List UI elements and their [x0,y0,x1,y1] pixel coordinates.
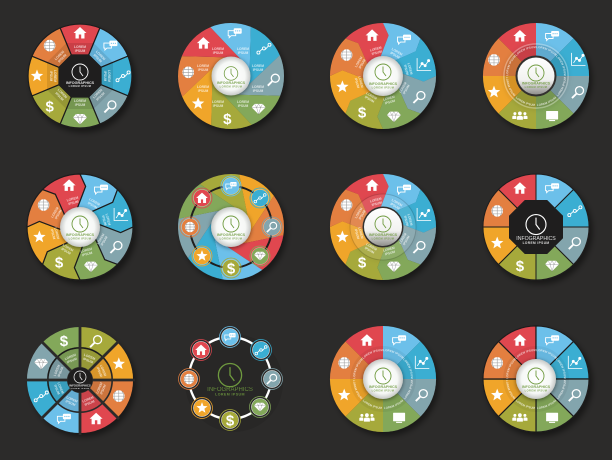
sector labels: IPSUM [103,71,107,81]
bubble: star [192,398,212,418]
sectors [28,24,132,128]
sector labels: LOREM [398,232,408,245]
curved labels: LOREM IPSUM [362,349,383,359]
sector labels: IPSUM [253,68,263,72]
sector labels: LOREM [365,91,378,101]
sector labels: LOREM [357,76,364,88]
sector labels: IPSUM [82,357,94,365]
sector labels: LOREM [369,196,382,203]
sector labels: LOREM [105,213,112,226]
center disc: INFOGRAPHICS [369,82,398,86]
panel: large octagon wheel, row 2 column 4 [479,170,593,284]
sector labels: IPSUM [403,215,410,227]
curved labels: LOREM IPSUM [384,400,404,409]
sector labels: LOREM [237,100,249,104]
panel: floating bubble ring, row 3 column 2 [178,326,283,432]
curved labels: LOREM IPSUM [537,400,556,409]
sector labels: IPSUM [99,384,107,395]
sector labels: LOREM [354,207,364,219]
bubble: home [190,340,212,360]
sector labels: IPSUM [50,229,56,240]
sector labels [353,45,414,106]
inner ring [504,44,568,108]
icons: $ [60,333,69,350]
sector labels: IPSUM [354,77,360,89]
panel: bubble ring over swirl, row 2 column 2 [175,171,287,283]
sector labels: LOREM [354,56,364,68]
sectors [319,163,447,291]
curved labels: LOREM IPSUM [506,380,516,400]
center disc: LOREM IPSUM [220,84,242,88]
sector labels: LOREM [96,233,106,245]
center disc: INFOGRAPHICS [522,82,551,86]
sector labels [197,47,264,108]
sector labels: LOREM [53,227,60,240]
sector labels: LOREM [197,64,209,68]
sector labels: IPSUM [82,251,93,257]
sector labels: IPSUM [238,51,248,55]
sector labels: LOREM [74,45,86,49]
curved labels: LOREM IPSUM [353,380,362,400]
center disc: LOREM IPSUM [525,85,547,89]
ring labels: LOREM IPSUM [506,55,516,76]
center disc [211,207,251,247]
sector labels: LOREM [53,70,57,82]
curved labels: LOREM IPSUM [515,349,536,359]
panel: ringed wheel, row 1 column 4 [482,23,592,134]
icons: $ [358,254,367,271]
swirl sectors [175,171,287,283]
sector labels: IPSUM [371,200,383,207]
sector labels: LOREM [398,81,408,94]
sector labels: LOREM [95,382,104,394]
sector labels: LOREM [66,395,78,404]
icons: $ [55,254,64,271]
sector labels: IPSUM [53,384,61,395]
sector labels: IPSUM [57,53,68,63]
ring labels: LOREM IPSUM [516,96,535,106]
sector labels: IPSUM [198,89,208,93]
sector labels: LOREM [252,85,264,89]
sector labels [49,45,111,107]
sector labels: IPSUM [389,51,401,60]
icons [491,334,582,423]
inner shade [350,346,416,412]
sectors [16,163,144,291]
inner ring [350,194,416,260]
sector labels: IPSUM [389,202,401,211]
panel: pinwheel wheel, row 1 column 2 [178,23,284,129]
center disc [60,207,100,247]
sector labels [53,353,107,407]
sector labels: LOREM [369,45,382,52]
sectors [178,23,284,129]
ring labels: LOREM IPSUM [506,77,516,96]
curved labels: LOREM IPSUM [506,358,516,379]
sector labels: LOREM [54,50,65,61]
bubble: diamond [250,396,270,418]
sector labels: IPSUM [75,49,85,53]
center disc: LOREM IPSUM [372,236,394,240]
sector labels: IPSUM [238,104,248,108]
sector labels: IPSUM [354,228,360,240]
sector labels: LOREM [99,364,107,377]
sector labels: LOREM [57,88,68,99]
center disc: INFOGRAPHICS [217,233,246,237]
bubble: star [192,246,212,266]
sectors [479,322,593,436]
inner sectors [46,346,114,414]
bubble: home [192,188,212,208]
icons: $ [45,98,54,115]
sector labels: LOREM [407,62,414,75]
curved labels: LOREM IPSUM [556,380,566,400]
center disc: LOREM IPSUM [372,86,394,90]
sectors [319,12,447,140]
sector labels: IPSUM [57,366,65,378]
sector labels: LOREM [383,246,395,253]
ring labels: LOREM IPSUM [556,77,566,96]
sector labels: LOREM [365,242,378,252]
sector labels: LOREM [212,47,224,51]
panel: kinked pinwheel wheel, row 1 column 3 [319,12,447,140]
sector labels: IPSUM [384,99,396,105]
sector labels: LOREM [391,47,403,57]
panel: separated kinked wheel, row 2 column 1 [16,163,144,291]
outer sectors [23,323,137,437]
curved labels [353,349,413,409]
sector labels: IPSUM [87,201,98,210]
sector labels: IPSUM [358,209,367,221]
center clock and title: INFOGRAPHICS [207,387,253,393]
sector labels: LOREM [53,364,61,377]
bubble: network [250,188,270,208]
inner shade [503,346,569,412]
center disc [516,56,556,96]
sector labels: IPSUM [95,91,106,102]
inner band shade [47,43,113,109]
icons [338,334,429,423]
center disc: INFOGRAPHICS [66,233,95,237]
center hub: INFOGRAPHICS [66,81,95,85]
sector labels: IPSUM [402,84,411,95]
sector labels: IPSUM [96,366,103,378]
curved labels: LOREM IPSUM [353,358,363,379]
center disc: INFOGRAPHICS [522,385,551,389]
sector labels: IPSUM [68,200,79,206]
sector labels: LOREM [83,353,96,361]
sector labels: IPSUM [403,64,410,76]
sector labels: LOREM [212,100,224,104]
sector labels: IPSUM [213,104,223,108]
curved labels: LOREM IPSUM [403,358,413,379]
sector labels: LOREM [80,247,93,254]
panel: curved-label wheel, row 3 column 3 [330,326,440,436]
sector labels: LOREM [391,198,403,208]
sector labels: LOREM [50,206,60,219]
sector labels: LOREM [82,395,95,404]
sector labels: IPSUM [65,399,76,407]
sector labels: IPSUM [253,89,263,93]
icons: $ [223,111,232,128]
center disc: LOREM IPSUM [69,236,91,240]
white ring [189,337,271,419]
center octagon: LOREM IPSUM [523,241,549,245]
ring labels: LOREM IPSUM [537,96,556,106]
sector labels: IPSUM [54,91,65,102]
sector labels: IPSUM [198,68,208,72]
bubble: globe [178,368,200,390]
bubble: globe [180,217,200,237]
sector labels: IPSUM [358,58,367,70]
panel: octagon-hub wheel, row 1 column 1 [28,24,132,128]
center disc [363,359,403,399]
panel: kinked wheel with ring, row 2 column 3 [319,163,447,291]
sector labels: IPSUM [364,95,375,104]
center disc: INFOGRAPHICS [369,385,398,389]
sector labels: IPSUM [60,247,72,256]
curved labels: LOREM IPSUM [404,380,413,400]
sector labels: IPSUM [213,51,223,55]
sector labels: IPSUM [371,49,383,56]
sector labels: IPSUM [54,209,63,220]
sector labels: LOREM [252,64,264,68]
center clock and title: LOREM IPSUM [215,392,245,396]
sector labels: LOREM [357,227,364,239]
bubble: dollar: $ [226,412,235,430]
center hub: INFOGRAPHICS [69,384,91,388]
connecting ring [190,186,272,268]
icons: $ [516,258,525,275]
center octagon: INFOGRAPHICS [516,236,556,242]
sector labels: LOREM [92,88,103,99]
sector labels: IPSUM [100,235,109,247]
sector labels [49,195,112,258]
center disc [363,56,403,96]
bubble: chat [220,326,240,348]
sector labels: IPSUM [402,235,411,246]
icons: $ [358,104,367,121]
sector labels: LOREM [56,382,65,395]
sector labels: IPSUM [66,357,78,364]
center disc [212,56,250,96]
sector labels: LOREM [383,95,395,102]
curved labels: LOREM IPSUM [362,400,382,409]
center hub [59,55,101,97]
sector labels: LOREM [88,197,101,207]
sectors [326,322,440,436]
sector labels: IPSUM [49,71,53,81]
sector labels: LOREM [74,99,86,103]
ring labels: LOREM IPSUM [536,46,557,56]
ring labels: LOREM IPSUM [515,46,536,56]
bubble: chat [221,176,241,196]
faint shadow disc [185,334,283,432]
center disc [516,359,556,399]
ring labels: LOREM IPSUM [556,55,566,76]
sector labels: IPSUM [364,246,375,255]
panel: split two-band wheel, row 3 column 1 [23,323,137,437]
center disc: LOREM IPSUM [220,236,242,240]
sector labels: LOREM [107,70,111,82]
center clock and title [207,364,253,396]
sector labels: LOREM [64,353,77,361]
sectors [479,19,593,133]
ring labels [506,46,566,106]
center disc: INFOGRAPHICS [369,233,398,237]
sector labels: IPSUM [84,399,95,407]
center hub: LOREM IPSUM [69,84,91,88]
center hub: LOREM IPSUM [71,388,89,390]
curved labels: LOREM IPSUM [383,349,404,359]
sector labels: LOREM [95,50,106,61]
sector labels: LOREM [407,213,414,226]
center disc: LOREM IPSUM [525,388,547,392]
sector labels: IPSUM [93,53,103,64]
curved labels: LOREM IPSUM [536,349,557,359]
sector labels: LOREM [197,85,209,89]
sector labels: LOREM [237,47,249,51]
sector labels [353,196,414,257]
sector labels: LOREM [66,195,79,202]
sector labels: LOREM [62,243,74,253]
panel: separated curved-label wheel, row 3 column 4 [482,325,593,437]
bubble: diamond [250,246,270,266]
curved labels [506,349,566,409]
sector labels: IPSUM [75,103,85,107]
radial gaps [25,325,135,435]
sector labels: IPSUM [384,250,396,256]
bubble: search [262,217,282,237]
bubble: network [250,340,272,360]
center disc: LOREM IPSUM [372,388,394,392]
bubble: search [262,368,282,390]
center disc [362,206,404,248]
sectors [479,170,593,284]
bubble: dollar: $ [227,260,236,278]
curved labels: LOREM IPSUM [516,400,535,409]
center hub [68,368,92,392]
center disc: INFOGRAPHICS [217,81,246,85]
sector labels: IPSUM [101,215,107,226]
icons [488,30,586,121]
center octagon [509,200,563,254]
curved labels: LOREM IPSUM [556,358,566,379]
